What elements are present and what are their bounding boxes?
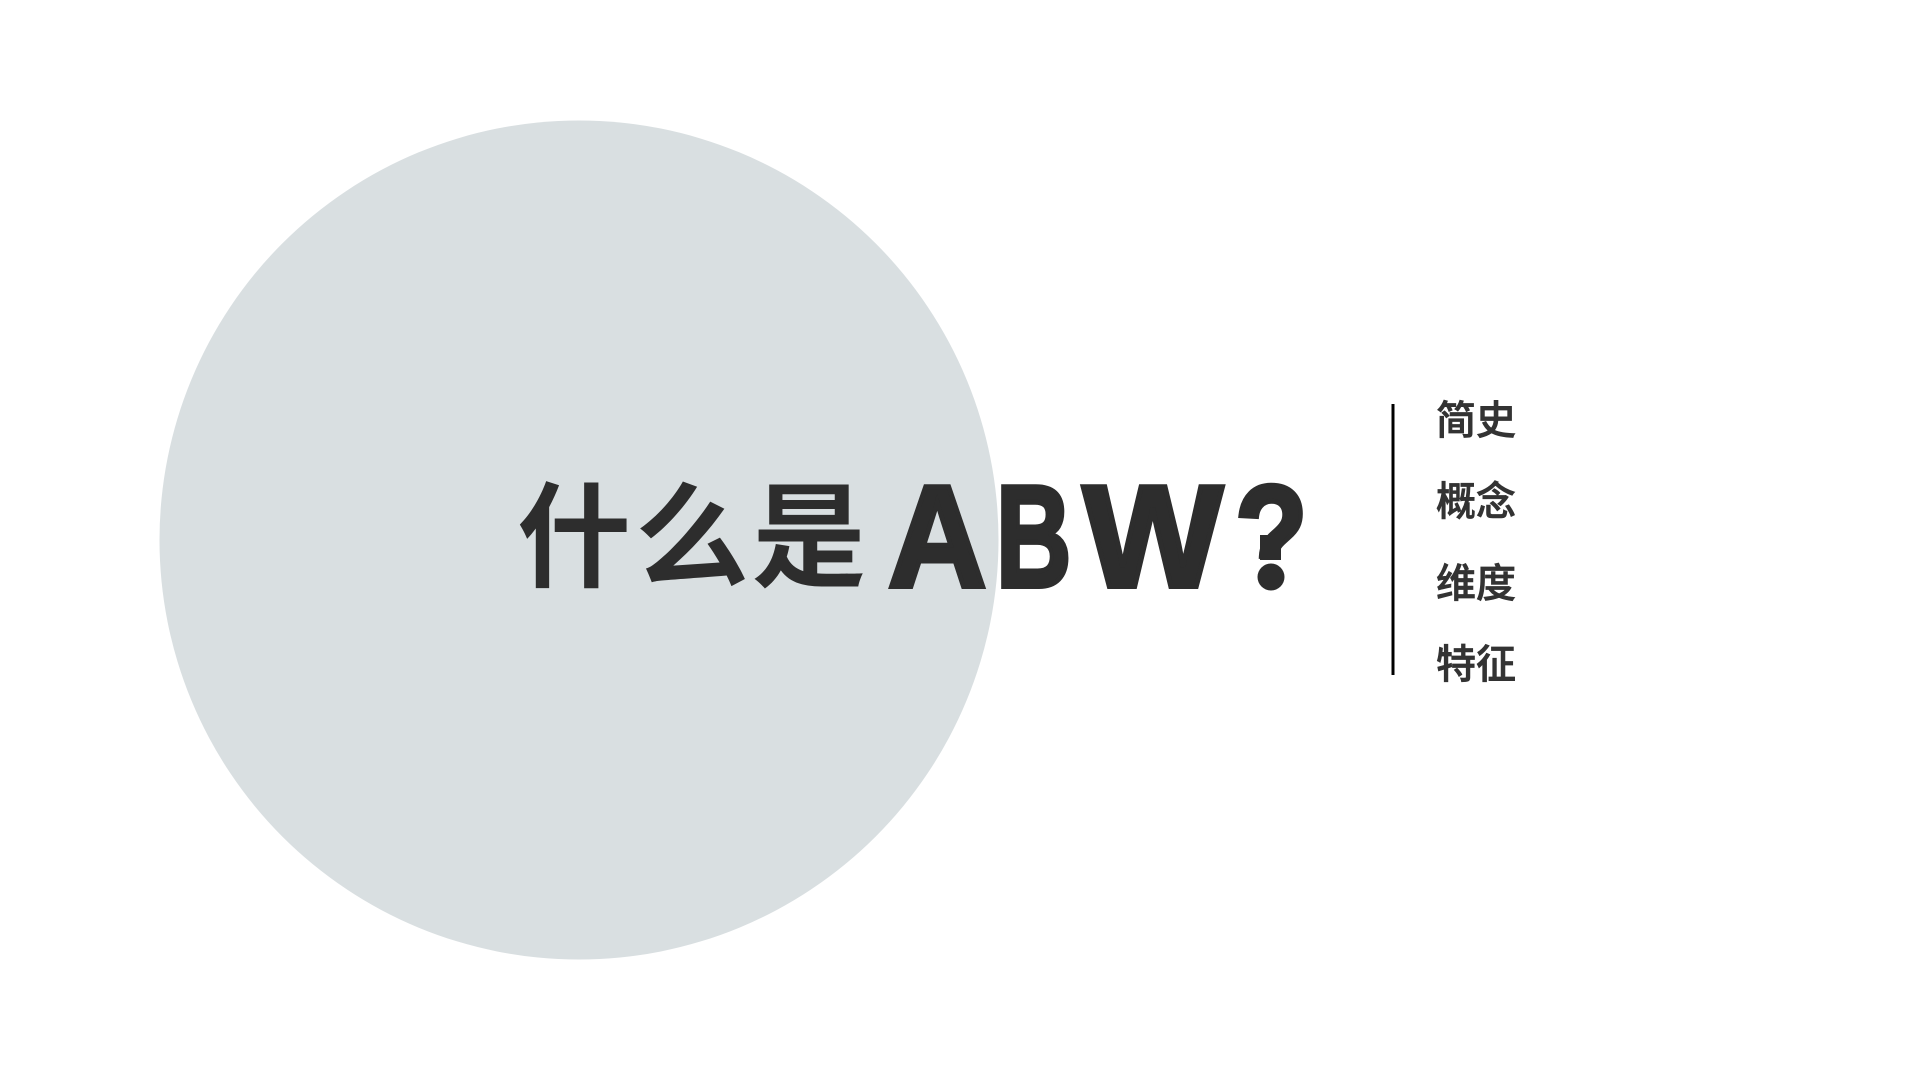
section list: 特征 [1436, 643, 1516, 687]
section list: 简史 [1436, 399, 1516, 443]
title: 什 [517, 476, 631, 603]
section list: 概念 [1436, 480, 1516, 524]
title: 是 [752, 476, 866, 603]
title: A [888, 456, 986, 617]
title: 么 [635, 476, 749, 603]
section list: 维度 [1436, 562, 1516, 606]
title: ? [1235, 456, 1308, 618]
title [520, 481, 1303, 590]
title: B [996, 456, 1071, 617]
vertical divider [1392, 404, 1394, 675]
background circle [160, 120, 998, 960]
title: W [1083, 456, 1223, 618]
section list [1436, 399, 1516, 687]
